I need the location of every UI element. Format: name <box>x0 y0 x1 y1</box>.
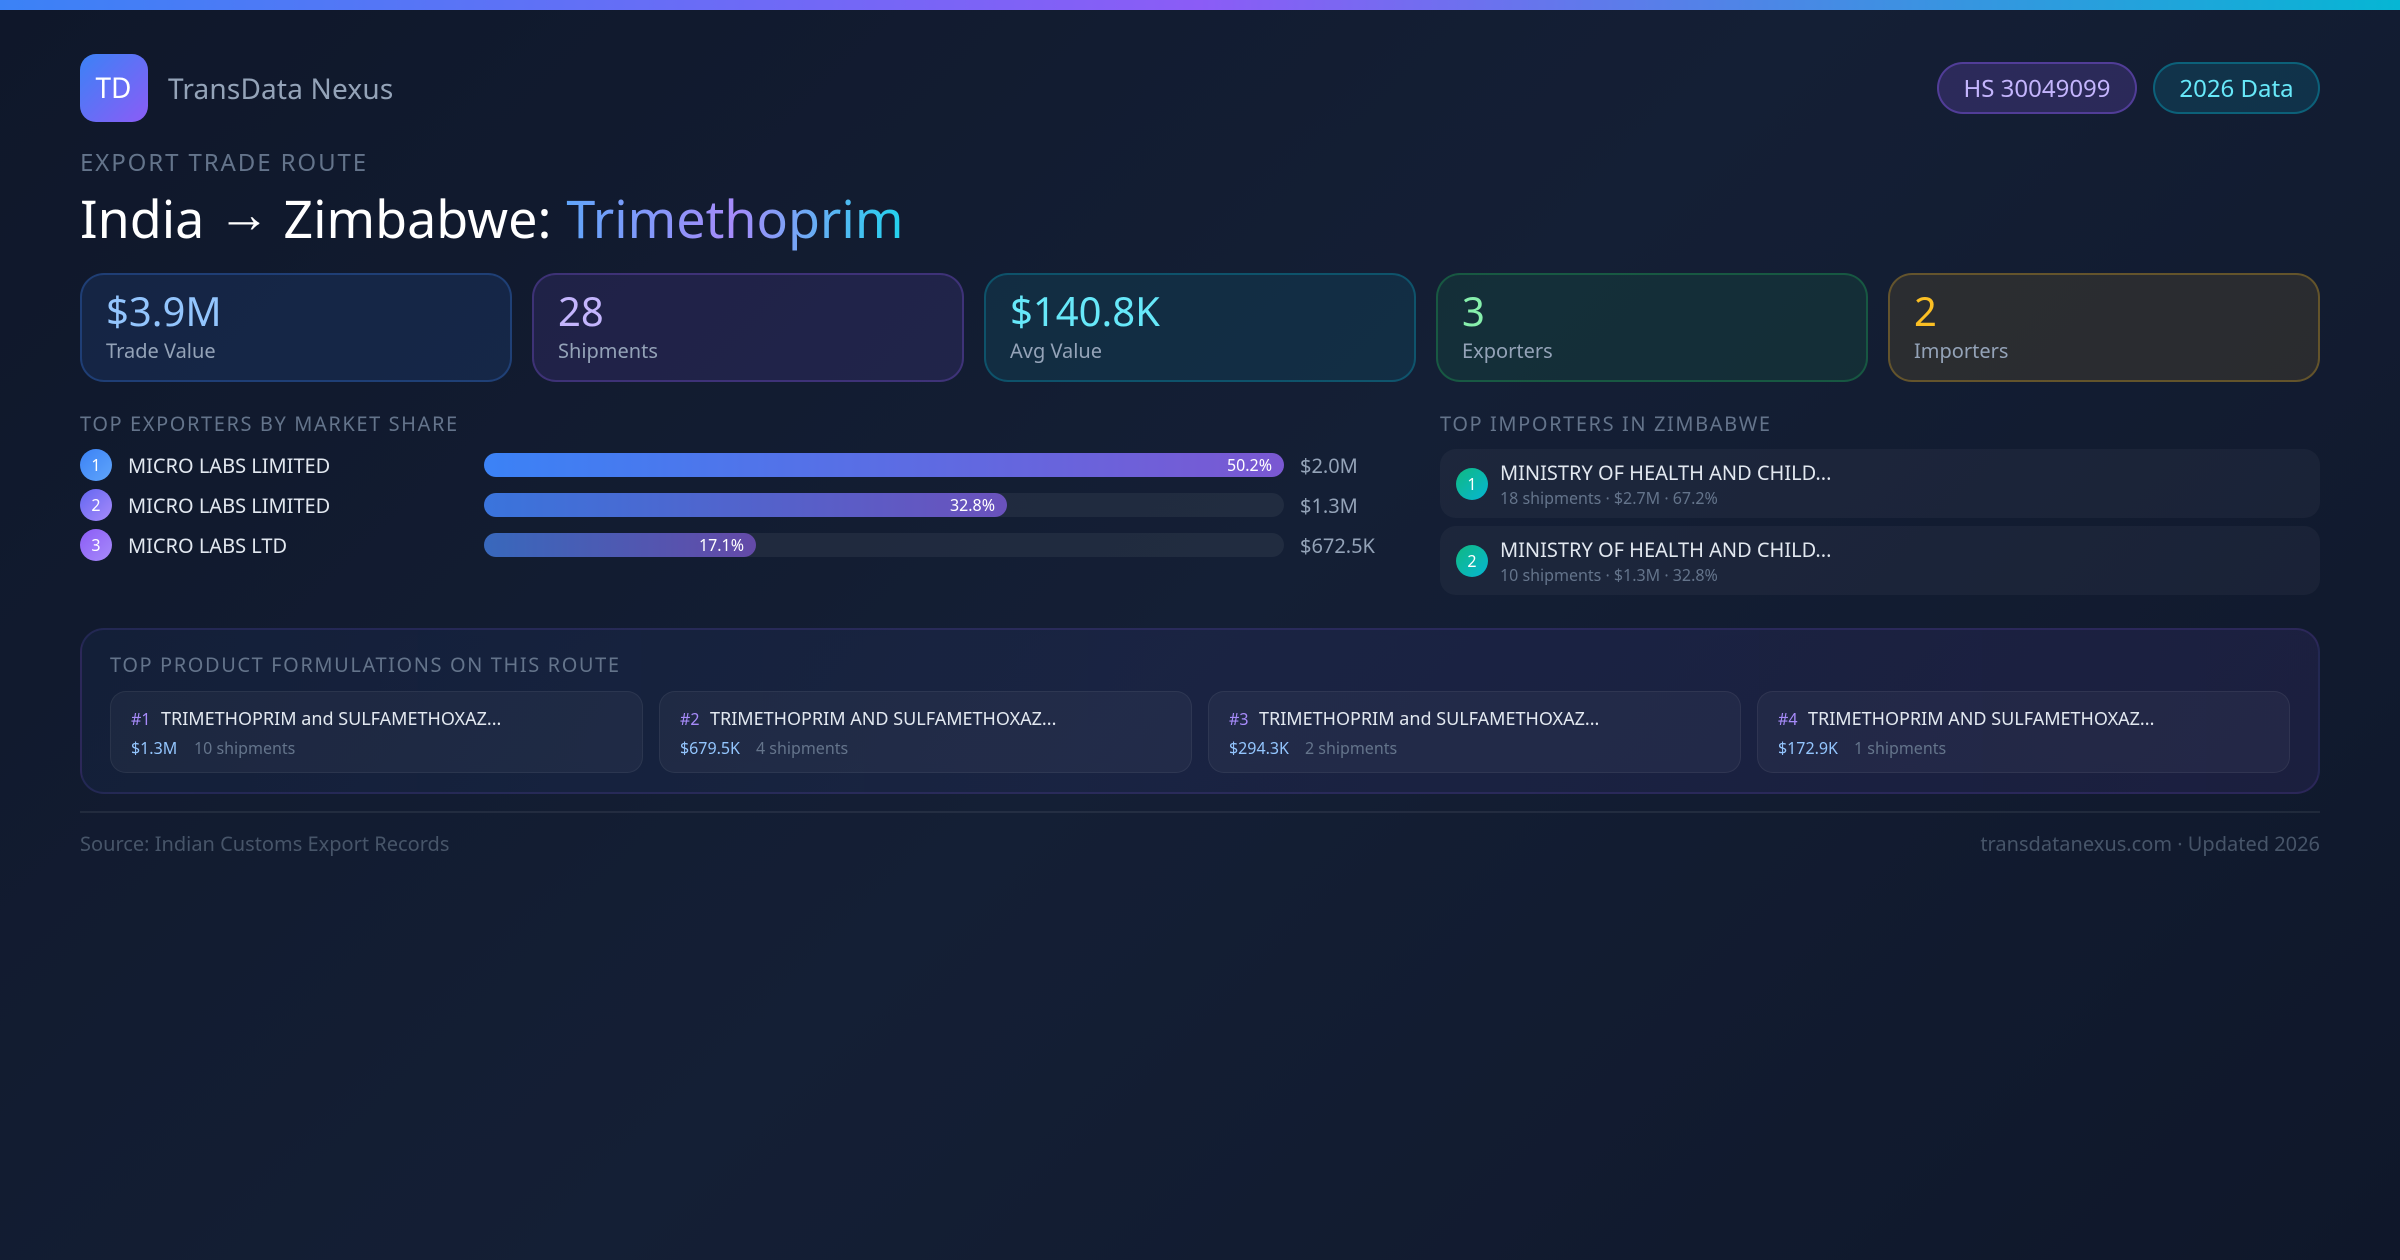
product card 2: $679.5K <box>680 737 740 759</box>
heading: product formulations: TOP PRODUCT FORMULATIONS ON THIS ROUTE <box>110 651 621 678</box>
exporter row 1: 1 <box>91 454 101 476</box>
importer card 2 <box>1440 526 2320 595</box>
stat card: exporters: Exporters <box>1462 337 1553 364</box>
stat card: average value: $140.8K <box>1010 283 1160 338</box>
badge: data year: 2026 Data <box>2179 72 2294 105</box>
product card 3: $294.3K <box>1229 737 1289 759</box>
stat card: shipments: Shipments <box>558 337 658 364</box>
stat card: shipments: 28 <box>558 283 604 338</box>
footer site: transdatanexus.com · Updated 2026 <box>1980 830 2320 857</box>
panel: product formulations <box>80 628 2320 794</box>
product card 4: 1 shipments <box>1854 737 1946 759</box>
brand name: TransData Nexus <box>168 70 393 108</box>
product card 4: #4 <box>1778 708 1798 730</box>
product card 2: TRIMETHOPRIM AND SULFAMETHOXAZ... <box>710 707 1056 731</box>
badge: HS code <box>1937 62 2137 114</box>
title: India → Zimbabwe: Trimethoprim <box>80 183 903 254</box>
exporter bar chart <box>80 449 1375 561</box>
product card 1 <box>110 691 643 773</box>
product card 4 <box>1757 691 2290 773</box>
stat card: importers: 2 <box>1914 283 1937 338</box>
stat card: importers <box>1888 273 2320 382</box>
importer card 1: 18 shipments · $2.7M · 67.2% <box>1500 487 1718 509</box>
exporter row 1: $2.0M <box>1300 452 1358 479</box>
stat card: average value: Avg Value <box>1010 337 1102 364</box>
exporter row 3: MICRO LABS LTD <box>128 532 287 559</box>
stat card: trade value: Trade Value <box>106 337 216 364</box>
product card 4: TRIMETHOPRIM AND SULFAMETHOXAZ... <box>1808 707 2154 731</box>
exporter row 1: 50.2% <box>1227 454 1272 476</box>
stat card: average value <box>984 273 1416 382</box>
heading: top importers: TOP IMPORTERS IN ZIMBABWE <box>1440 410 1772 437</box>
product card 1: #1 <box>131 708 150 730</box>
product card 2 <box>659 691 1192 773</box>
importer card 1: MINISTRY OF HEALTH AND CHILD... <box>1500 459 1831 486</box>
logo mark: TD <box>95 69 132 107</box>
exporter row 1 <box>80 449 1358 481</box>
exporter row 3: 17.1% <box>699 534 744 556</box>
stat card: trade value <box>80 273 512 382</box>
badge: HS code: HS 30049099 <box>1963 72 2111 105</box>
product card 3: TRIMETHOPRIM and SULFAMETHOXAZ... <box>1259 707 1599 731</box>
product card 1: TRIMETHOPRIM and SULFAMETHOXAZ... <box>161 707 501 731</box>
badge: data year <box>2153 62 2320 114</box>
product card 2: 4 shipments <box>756 737 848 759</box>
exporter row 2 <box>80 489 1358 521</box>
exporter row 1: MICRO LABS LIMITED <box>128 452 330 479</box>
exporter row 2: $1.3M <box>1300 492 1358 519</box>
product card 1: 10 shipments <box>194 737 295 759</box>
exporter row 2: 2 <box>91 494 101 516</box>
importer card 1: 1 <box>1467 473 1477 495</box>
product card 3: #3 <box>1229 708 1248 730</box>
exporter row 2: MICRO LABS LIMITED <box>128 492 330 519</box>
product card 3: 2 shipments <box>1305 737 1397 759</box>
product card 1: $1.3M <box>131 737 177 759</box>
eyebrow label: EXPORT TRADE ROUTE <box>80 146 368 179</box>
importer card 2: 10 shipments · $1.3M · 32.8% <box>1500 564 1718 586</box>
exporter row 3 <box>80 529 1375 561</box>
stat card: shipments <box>532 273 964 382</box>
exporter row 2: 32.8% <box>950 494 995 516</box>
stat card: importers: Importers <box>1914 337 2008 364</box>
importer card 1 <box>1440 449 2320 518</box>
stat card: exporters: 3 <box>1462 283 1485 338</box>
top gradient bar <box>0 0 2400 10</box>
heading: top exporters: TOP EXPORTERS BY MARKET SHARE <box>80 410 459 437</box>
importer card 2: MINISTRY OF HEALTH AND CHILD... <box>1500 536 1831 563</box>
exporter row 3: $672.5K <box>1300 532 1375 559</box>
logo mark <box>80 54 148 122</box>
product card 4: $172.9K <box>1778 737 1838 759</box>
product card 2: #2 <box>680 708 700 730</box>
product card 3 <box>1208 691 1741 773</box>
footer source: Source: Indian Customs Export Records <box>80 830 449 857</box>
stat card: trade value: $3.9M <box>106 283 222 338</box>
exporter row 3: 3 <box>91 534 101 556</box>
stat card: exporters <box>1436 273 1868 382</box>
importer card 2: 2 <box>1467 550 1477 572</box>
